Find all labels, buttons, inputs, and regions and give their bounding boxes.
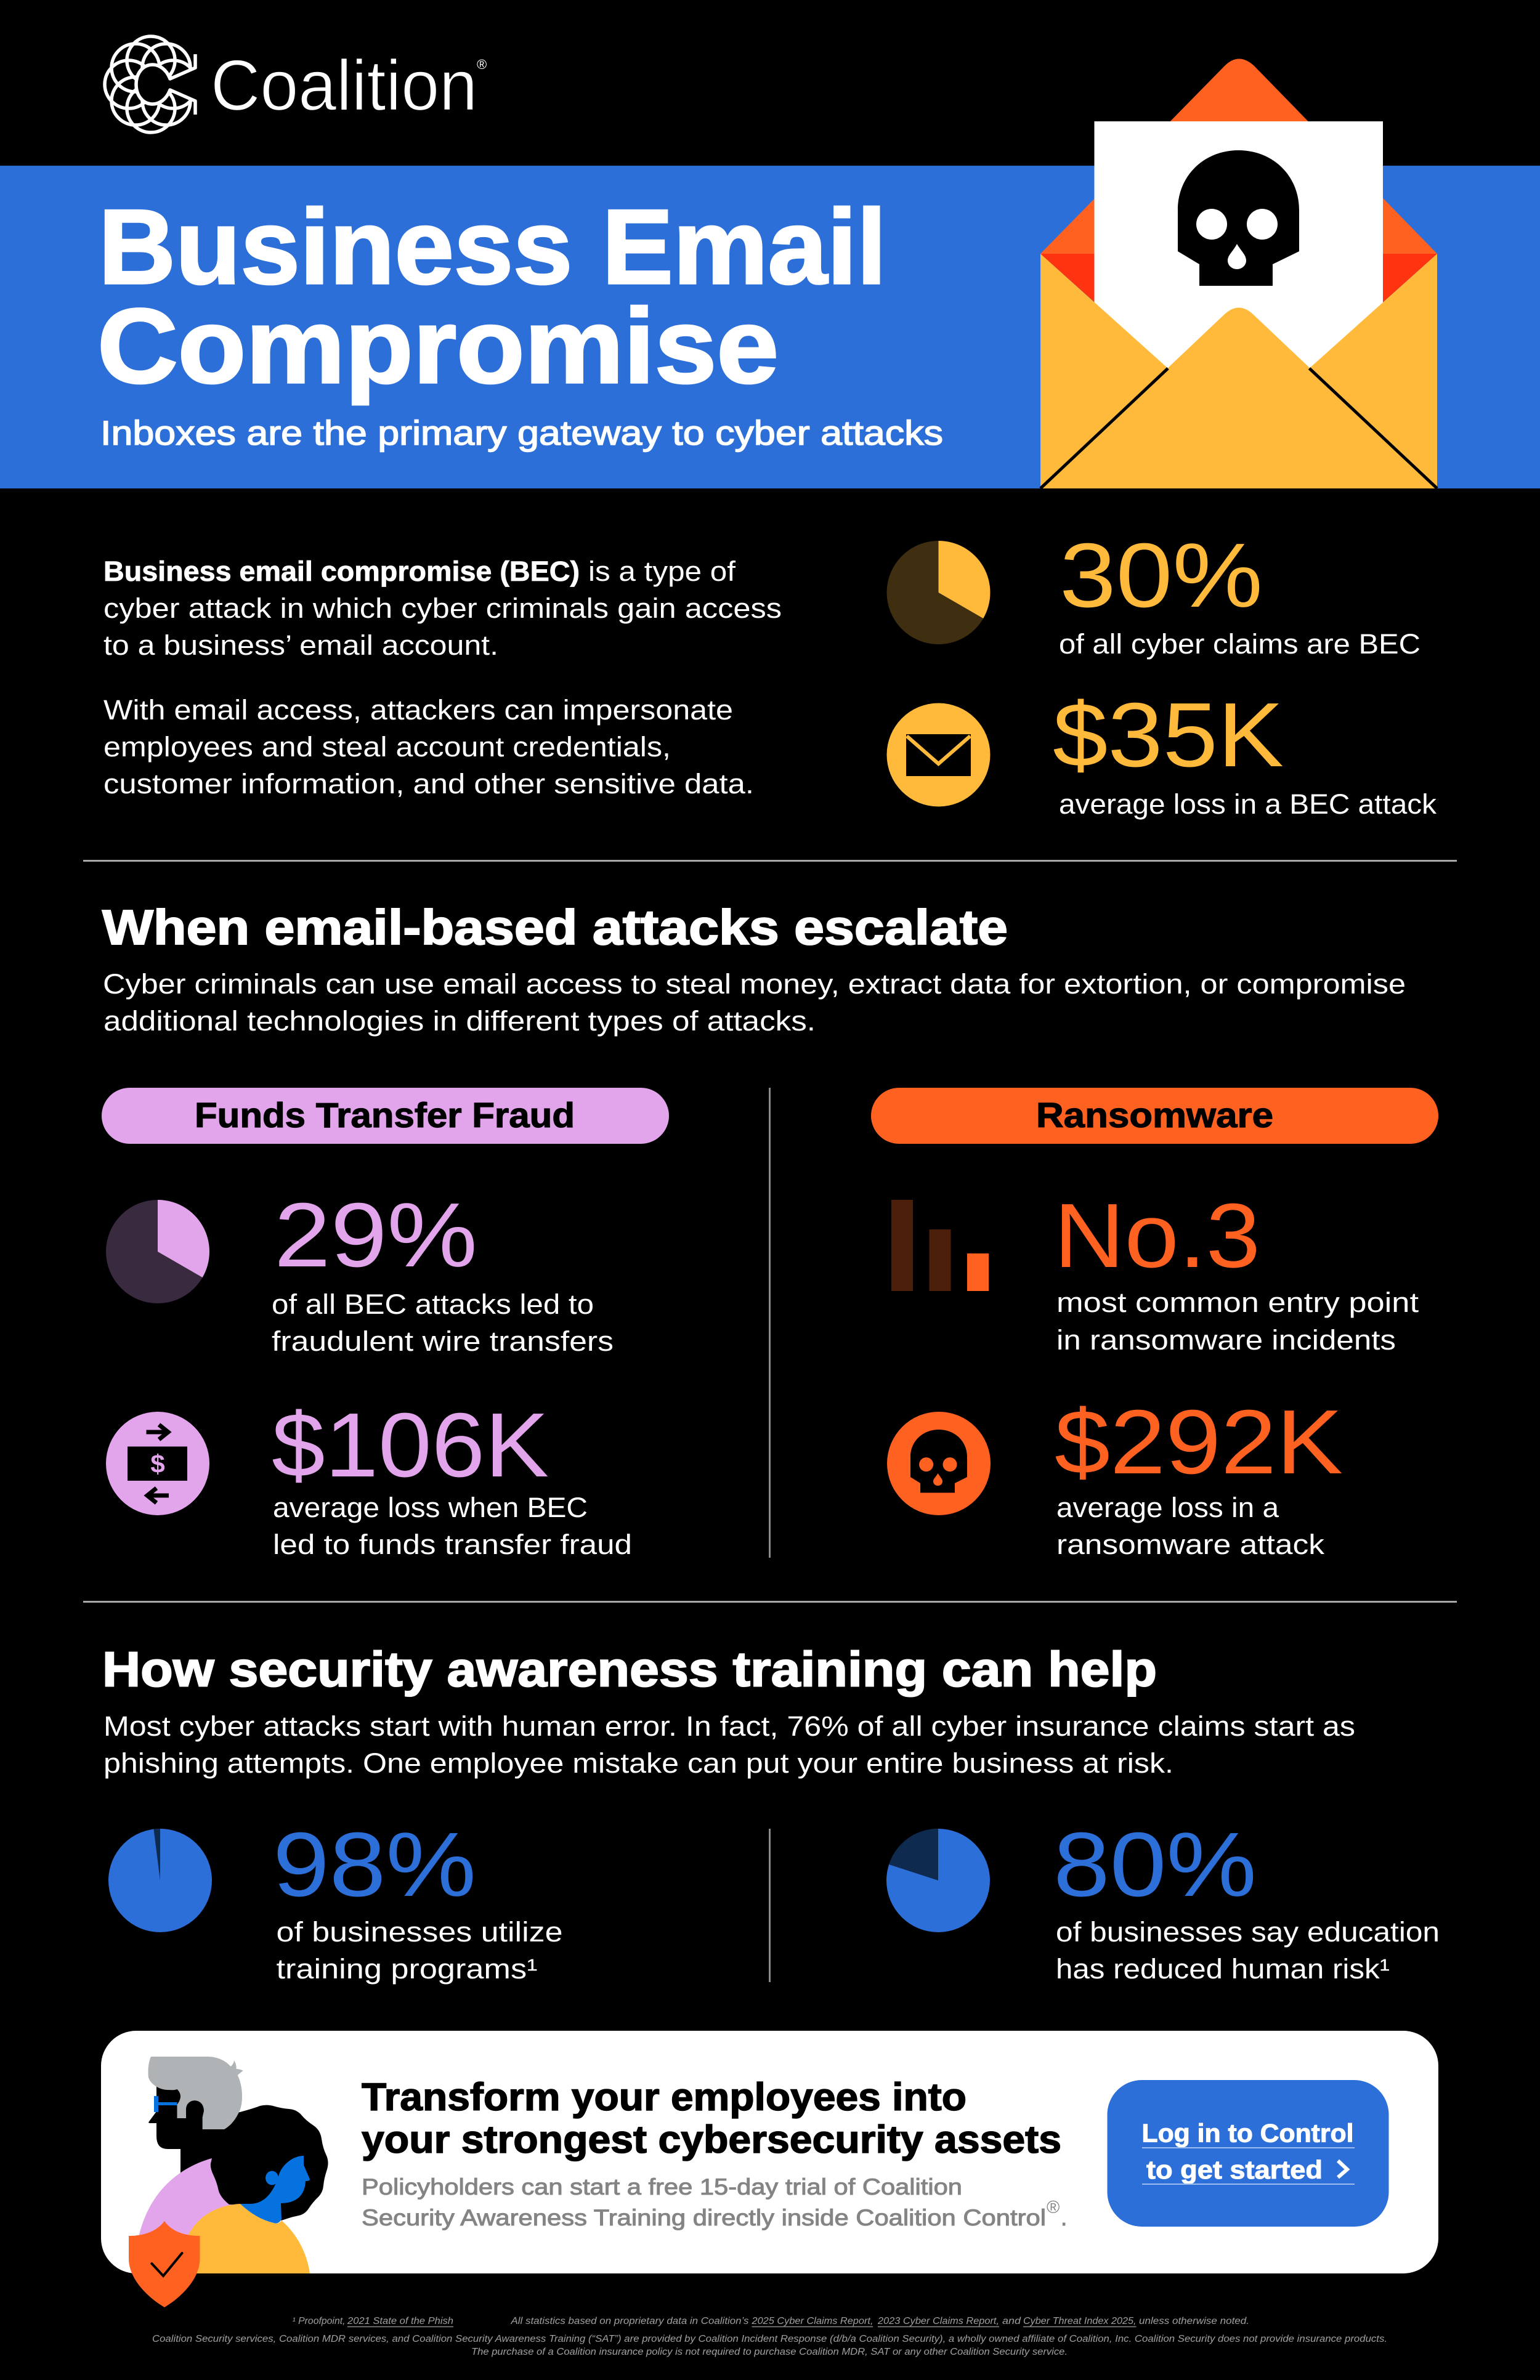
stat: 80%: of businesses say education [1056, 1916, 1440, 1948]
footnotes [152, 2316, 1387, 2357]
button: Log in to Control: to get started [1146, 2155, 1323, 2184]
stat: $35K average loss: $35K [1053, 684, 1284, 786]
footnotes: ¹ Proofpoint, [292, 2316, 345, 2326]
button: Log in to Control: Log in to Control [1142, 2119, 1354, 2147]
footnotes: 2021 State of the Phish [347, 2316, 453, 2326]
intro text block: to a business’ email account. [103, 629, 498, 661]
title [97, 188, 886, 405]
stat: No.3: No.3 [1054, 1185, 1260, 1287]
stat: $35K average loss [887, 684, 1437, 820]
stat: 30% of claims: 30% [1060, 525, 1263, 626]
section intro text: additional technologies in different types of attacks. [103, 1005, 816, 1037]
stat: $106K: $106K [272, 1394, 549, 1496]
pie chart: 98% [108, 1829, 212, 1932]
icon: envelope in circle [887, 703, 991, 807]
stat: 98%: 98% [273, 1814, 476, 1916]
footnotes: 2025 Cyber Claims Report, [751, 2316, 873, 2326]
CTA heading [362, 2076, 1061, 2161]
hero banner [0, 166, 1540, 488]
stat: No.3: most common entry point [1056, 1287, 1419, 1318]
section intro text: Cyber criminals can use email access to steal money, extract data for extortion, or compromise [103, 968, 1406, 1000]
stat: $106K: average loss when BEC [273, 1492, 588, 1523]
stat: $106K: led to funds transfer fraud [273, 1529, 632, 1560]
illustration: two employees with shield [129, 2057, 328, 2307]
icon: envelope with skull letter [1040, 59, 1437, 488]
pill: Funds Transfer Fraud [102, 1088, 669, 1144]
section intro text [103, 1710, 1355, 1779]
icon: globe C mark [105, 36, 213, 132]
stat: No.3 [891, 1185, 1419, 1356]
pie chart: 30% [887, 541, 991, 644]
stat: 80%: 80% [1053, 1814, 1257, 1916]
heading: When email-based attacks escalate: When email-based attacks escalate [102, 900, 1008, 955]
icon: money transfer: $ [150, 1449, 165, 1478]
footnotes: Coalition Security services, Coalition MDR services, and Coalition Security Awareness Training (“SAT”) are provided by Coalition Incident Response (d/b/a Coalition Security), a wholly owned affiliate of Coalition, Inc. Coalition Security does not provide insurance products. [152, 2334, 1387, 2344]
stat: 98%: training programs¹ [276, 1953, 537, 1985]
stat: 29%: of all BEC attacks led to [272, 1289, 594, 1320]
stat: 30% of claims [887, 525, 1420, 660]
pie chart: 80% [886, 1829, 990, 1932]
CTA heading: Transform your employees into [362, 2076, 967, 2119]
stat: 29% [106, 1184, 614, 1357]
section intro text [103, 968, 1406, 1037]
CTA body text: ® [1047, 2198, 1060, 2217]
subtitle: Inboxes are the primary gateway to cyber attacks [100, 413, 943, 452]
CTA heading: your strongest cybersecurity assets [362, 2118, 1061, 2161]
intro text block: With email access, attackers can impersonate [103, 694, 733, 726]
stat: 29%: fraudulent wire transfers [272, 1326, 614, 1357]
button: Log in to Control [1108, 2080, 1388, 2227]
pill: Ransomware [871, 1088, 1438, 1144]
footnotes: Cyber Threat Index 2025, [1023, 2316, 1136, 2326]
title: Compromise [97, 287, 779, 405]
panel: call to action [101, 2031, 1438, 2307]
registered mark: ® [477, 57, 487, 72]
intro text block: is a type of [588, 556, 736, 587]
stat: $292K [887, 1391, 1343, 1560]
section intro text: phishing attempts. One employee mistake can put your entire business at risk. [103, 1747, 1173, 1779]
wordmark: Coalition [211, 46, 477, 126]
stat: No.3: in ransomware incidents [1056, 1324, 1396, 1356]
icon: money transfer [106, 1412, 209, 1515]
intro text block: Business email compromise (BEC) [103, 556, 580, 587]
CTA body text: Security Awareness Training directly inside Coalition Control [362, 2205, 1046, 2230]
stat: 30% of claims: of all cyber claims are BEC [1059, 628, 1420, 660]
stat: $292K: average loss in a [1056, 1492, 1279, 1523]
footnotes: unless otherwise noted. [1139, 2316, 1249, 2326]
intro text block [103, 556, 782, 799]
logo: Coalition [105, 36, 487, 132]
pill: Ransomware: Ransomware [1036, 1096, 1273, 1135]
pill: Funds Transfer Fraud: Funds Transfer Fraud [195, 1096, 575, 1135]
pie chart: 29% [106, 1200, 209, 1303]
CTA body text [362, 2174, 1067, 2230]
stat: $292K: $292K [1055, 1391, 1343, 1493]
stat: 98% [108, 1814, 563, 1985]
stat: $292K: ransomware attack [1056, 1529, 1325, 1560]
footnotes: All statistics based on proprietary data in Coalition’s [510, 2316, 749, 2326]
stat: 80%: has reduced human risk¹ [1056, 1953, 1390, 1985]
section intro text: Most cyber attacks start with human error. In fact, 76% of all cyber insurance claims start as [103, 1710, 1355, 1742]
footnotes: The purchase of a Coalition insurance policy is not required to purchase Coalition MDR, SAT or any other Coalition Security service. [471, 2347, 1068, 2357]
arrow: chevron [1338, 2161, 1347, 2177]
icon: skull in circle [887, 1412, 991, 1515]
stat: 29%: 29% [274, 1184, 477, 1286]
intro text block: customer information, and other sensitive data. [103, 768, 754, 799]
heading: How security awareness training can help: How security awareness training can help [102, 1642, 1157, 1696]
stat: $106K [106, 1394, 632, 1560]
stat: 80% [886, 1814, 1440, 1985]
footnotes: 2023 Cyber Claims Report, [877, 2316, 999, 2326]
intro text block: cyber attack in which cyber criminals gain access [103, 593, 782, 624]
stat: 98%: of businesses utilize [276, 1916, 563, 1948]
footnotes: and [1002, 2316, 1022, 2326]
CTA body text: . [1061, 2205, 1067, 2230]
title: Business Email [99, 188, 886, 306]
stat: $35K average loss: average loss in a BEC attack [1059, 788, 1437, 820]
CTA body text: Policyholders can start a free 15-day trial of Coalition [362, 2174, 962, 2200]
bar chart: third place [891, 1200, 989, 1291]
intro text block: employees and steal account credentials, [103, 731, 671, 763]
icon: shield with check [129, 2221, 200, 2307]
icon: skull [1178, 150, 1299, 286]
